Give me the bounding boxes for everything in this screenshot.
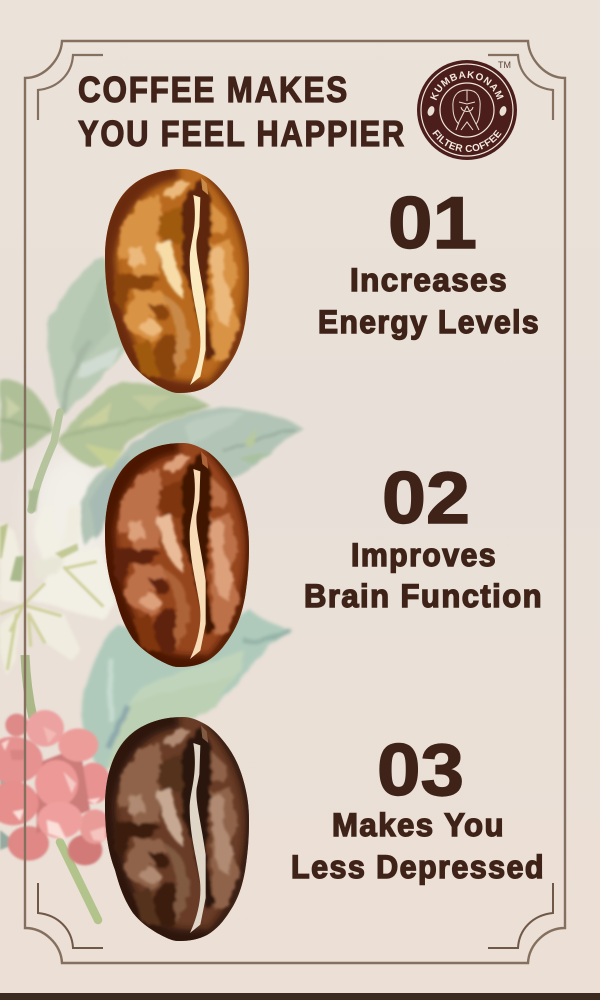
logo: Kumbakonam Filter Coffee: KUMBAKONAM bbox=[430, 71, 504, 100]
inner corner top left bbox=[38, 55, 103, 120]
stem below berries bbox=[60, 842, 98, 920]
benefit 02 bbox=[304, 458, 543, 614]
benefit 02: Brain Function bbox=[304, 578, 543, 614]
footer bar bbox=[0, 993, 600, 1000]
trademark: TM bbox=[498, 60, 511, 70]
leaf: top bbox=[47, 256, 125, 415]
benefit 02: Improves bbox=[351, 537, 497, 573]
leaf: middle green bbox=[57, 382, 210, 470]
benefit 01: Energy Levels bbox=[318, 304, 540, 340]
coffee bean: light roast bbox=[105, 169, 250, 393]
benefit 01 bbox=[318, 183, 540, 340]
leaf: lower right bbox=[81, 610, 293, 772]
logo bean icons bbox=[426, 105, 436, 117]
leaf: far left bbox=[0, 380, 53, 462]
benefit 01: 01 bbox=[388, 183, 477, 264]
coffee bean: medium roast bbox=[105, 443, 250, 667]
benefit 03 bbox=[291, 730, 545, 885]
logo: Kumbakonam Filter Coffee: FILTER COFFEE bbox=[432, 130, 502, 152]
title: COFFEE MAKES bbox=[78, 69, 349, 110]
logo figure bbox=[453, 90, 480, 130]
title: YOU FEEL HAPPIER bbox=[78, 113, 406, 154]
benefit 02: 02 bbox=[382, 458, 470, 539]
benefit 03: Makes You bbox=[332, 807, 505, 843]
inner corner bottom right bbox=[488, 883, 553, 948]
logo: Kumbakonam Filter Coffee bbox=[417, 60, 517, 160]
lower stem bbox=[25, 655, 33, 718]
benefit 01: Increases bbox=[350, 262, 508, 298]
benefit 03: 03 bbox=[377, 730, 464, 811]
flowers bbox=[0, 490, 115, 677]
benefit 03: Less Depressed bbox=[291, 849, 545, 885]
inner corner top right bbox=[488, 55, 553, 120]
coffee bean: dark roast bbox=[105, 717, 250, 941]
title bbox=[78, 69, 406, 154]
pale glow behind flowers bbox=[32, 450, 112, 570]
upper stem bbox=[31, 412, 60, 510]
leaf: centre right bbox=[80, 407, 303, 545]
inner corner bottom left bbox=[38, 883, 103, 948]
plant illustration: leaves, flowers and berries bbox=[0, 256, 303, 920]
berries bbox=[0, 710, 111, 865]
